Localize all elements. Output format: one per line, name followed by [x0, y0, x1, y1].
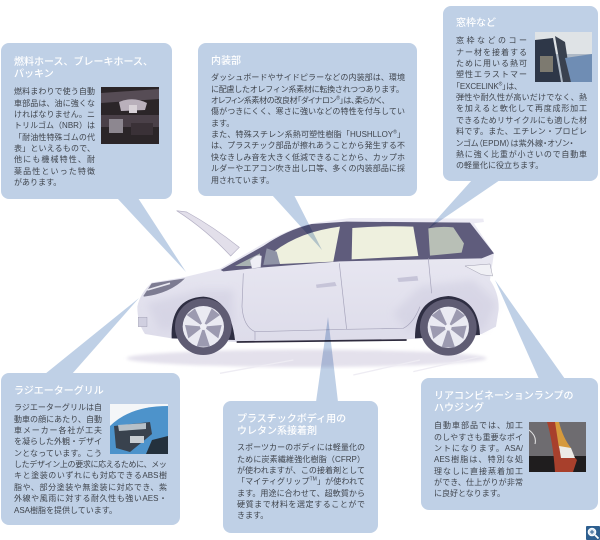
heading: rear lamp housing — [434, 390, 574, 414]
photo: car front grille — [110, 404, 168, 454]
text: rear lamp housing: に良好となります。 — [434, 489, 505, 498]
heading: window frame: 窓枠など — [456, 18, 496, 29]
text: window frame: ナー材を接着する — [456, 48, 527, 57]
text: interior: オレフィン系素材の改良材「ダイナロン®」は、柔らかく、 — [211, 95, 385, 105]
photo: engine bay — [101, 87, 159, 144]
front wheel — [172, 297, 235, 355]
text: urethane adhesive: が使われますが、この接着剤として — [237, 466, 365, 475]
text: interior: ルダーやエアコン吹き出し口等、多くの内装部品に採 — [211, 164, 405, 173]
heading: radiator grille: ラジエーターグリル — [14, 386, 104, 397]
text: rear lamp housing: ができ、仕上がりが非常 — [434, 478, 523, 487]
heading: fuel hose: パッキン — [14, 69, 54, 80]
text: interior: に配慮したオレフィン系素材に転換されつつあります。 — [211, 85, 404, 94]
text: window frame: 窓枠などのコー — [456, 36, 527, 45]
text: rear lamp housing: ントになります。ASA/ — [434, 444, 523, 453]
text: urethane adhesive: スポーツカーのボディには軽量化の — [237, 443, 365, 452]
text: rear lamp housing: 自動車部品では、加工 — [434, 421, 523, 430]
text: window frame: ために用いる熱可 — [456, 59, 527, 68]
pointer: fuel hose — [117, 198, 186, 272]
text: interior: 用されています。 — [211, 176, 274, 185]
heading: urethane adhesive: ウレタン系接着剤 — [237, 426, 317, 437]
pointer: adhesive — [316, 317, 338, 402]
panel: window frame — [443, 6, 598, 181]
rear window — [428, 227, 464, 256]
heading: fuel hose: 燃料ホース、ブレーキホース、 — [14, 57, 153, 68]
car body — [137, 218, 499, 342]
heading: urethane adhesive — [237, 413, 346, 437]
text: radiator grille: を凝らした外観・デザイ — [14, 437, 102, 446]
pointer: interior — [272, 195, 322, 250]
text: radiator grille: ASA樹脂を提供しています。 — [14, 506, 117, 515]
text: radiator grille: ンとなっています。こう — [14, 449, 102, 458]
heading: interior: 内装部 — [211, 56, 241, 67]
text: radiator grille — [14, 403, 167, 515]
text: rear lamp housing: 理なしに直接蒸着加工 — [434, 467, 523, 476]
text: interior: ます。 — [211, 119, 234, 128]
tail lamp — [465, 264, 493, 276]
front window — [274, 227, 340, 264]
rear wheel — [415, 296, 480, 356]
mirror — [250, 255, 262, 269]
text: fuel hose: トリルゴム（NBR）は — [14, 121, 95, 130]
text: window frame: できるためリサイクルにも適した材 — [456, 116, 587, 125]
panel: interior — [198, 43, 417, 196]
text: fuel hose: 車部品は、油に強くな — [14, 99, 95, 108]
middle window — [352, 226, 418, 259]
window band — [221, 222, 494, 271]
text: window frame: を加えると軟化して再度成形加工 — [456, 104, 587, 113]
door handles — [316, 276, 418, 288]
body shading — [147, 280, 497, 330]
text: radiator grille: したデザイン上の要求に応えるために、メッ — [14, 460, 167, 469]
text: interior: また、特殊スチレン系熱可塑性樹脂「HUSHLLOY®」 — [211, 129, 405, 139]
text: radiator grille: 脂や、部分塗装や無塗装に対応でき、紫 — [14, 483, 167, 492]
text: urethane adhesive: 硬質まで材料を選定することがで — [237, 500, 365, 509]
heading: urethane adhesive: プラスチックボディ用の — [237, 414, 346, 425]
pointer: window frame — [428, 180, 500, 229]
text: rear lamp housing: AES樹脂は、特別な処 — [434, 455, 523, 464]
panel: rear lamp housing — [421, 378, 598, 510]
open hood — [177, 211, 239, 256]
photo: rear lamp — [529, 422, 586, 472]
heading: rear lamp housing: ハウジング — [434, 403, 484, 414]
text: radiator grille: ラジエーターグリルは自 — [14, 403, 102, 412]
text: radiator grille: 車メーカー各社が工夫 — [14, 426, 102, 435]
text: urethane adhesive — [237, 443, 365, 520]
pointer: radiator grille — [45, 298, 139, 374]
text: fuel hose — [14, 87, 95, 187]
pointer: rear lamp — [495, 280, 565, 379]
text: interior: は、プラスチック部品が擦れあうことから発生する不 — [211, 141, 405, 150]
door lines — [242, 258, 432, 340]
heading: fuel hose — [14, 56, 153, 80]
text: window frame: 「EXCELINK®」は、 — [456, 81, 518, 91]
text: urethane adhesive: ために炭素繊維強化樹脂（CFRP） — [237, 455, 365, 464]
icon: magnifier — [586, 526, 600, 540]
text: interior — [211, 73, 405, 185]
panel: radiator grille — [1, 373, 180, 525]
text: window frame: 料です。また、エチレン・プロピレ — [456, 127, 587, 136]
text: window frame: の軽量化に役立ちます。 — [456, 161, 543, 170]
text: rear lamp housing: のしやすさも重要なポイ — [434, 433, 523, 442]
text: window frame — [456, 36, 587, 170]
panel: fuel hose — [1, 43, 172, 199]
text: fuel hose: 薬品性といった特徴 — [14, 167, 95, 176]
text: rear lamp housing — [434, 421, 523, 498]
text: window frame: 塑性エラストマー — [456, 70, 527, 79]
text: urethane adhesive: きます。 — [237, 511, 268, 520]
text: fuel hose: 表」といえるもので、 — [14, 144, 95, 153]
text: interior: ダッシュボードやサイドピラーなどの内装部は、環境 — [211, 73, 405, 82]
text: window frame: ンゴム（EPDM）は紫外線・オゾン・ — [456, 139, 574, 148]
ground shadow — [127, 350, 487, 375]
text: fuel hose: ければなりません。ニ — [14, 110, 95, 119]
fog lamp — [138, 317, 147, 327]
text: fuel hose: 燃料まわりで使う自動 — [14, 87, 95, 96]
text: radiator grille: 動車の顔にあたり、自動 — [14, 415, 102, 424]
headlight — [143, 278, 185, 297]
text: fuel hose: 「耐油性特殊ゴムの代 — [14, 133, 95, 142]
pointers — [45, 180, 565, 402]
text: radiator grille: キと塗装のいずれにも対応できるABS樹 — [14, 471, 167, 480]
text: interior: 快なきしみ音を大きく低減できることから、カップホ — [211, 153, 405, 162]
photo: car window — [535, 32, 592, 82]
text: radiator grille: 外線や風雨に対する耐久性も強いAES・ — [14, 494, 167, 503]
text: urethane adhesive: ます。用途に合わせて、超軟質から — [237, 489, 365, 498]
text: interior: 傷がつきにくく、寒さに強いなどの特性を付与してい — [211, 107, 405, 116]
text: window frame: 熱に強く比重が小さいので自動車 — [456, 150, 587, 159]
heading: rear lamp housing: リアコンビネーションランプの — [434, 391, 574, 402]
car — [137, 211, 499, 356]
panel: urethane adhesive — [223, 401, 378, 533]
text: fuel hose: があります。 — [14, 178, 61, 187]
text: fuel hose: 他にも機械特性、耐 — [14, 155, 95, 164]
text: window frame: 弾性や耐久性が高いだけでなく、熱 — [456, 93, 587, 102]
